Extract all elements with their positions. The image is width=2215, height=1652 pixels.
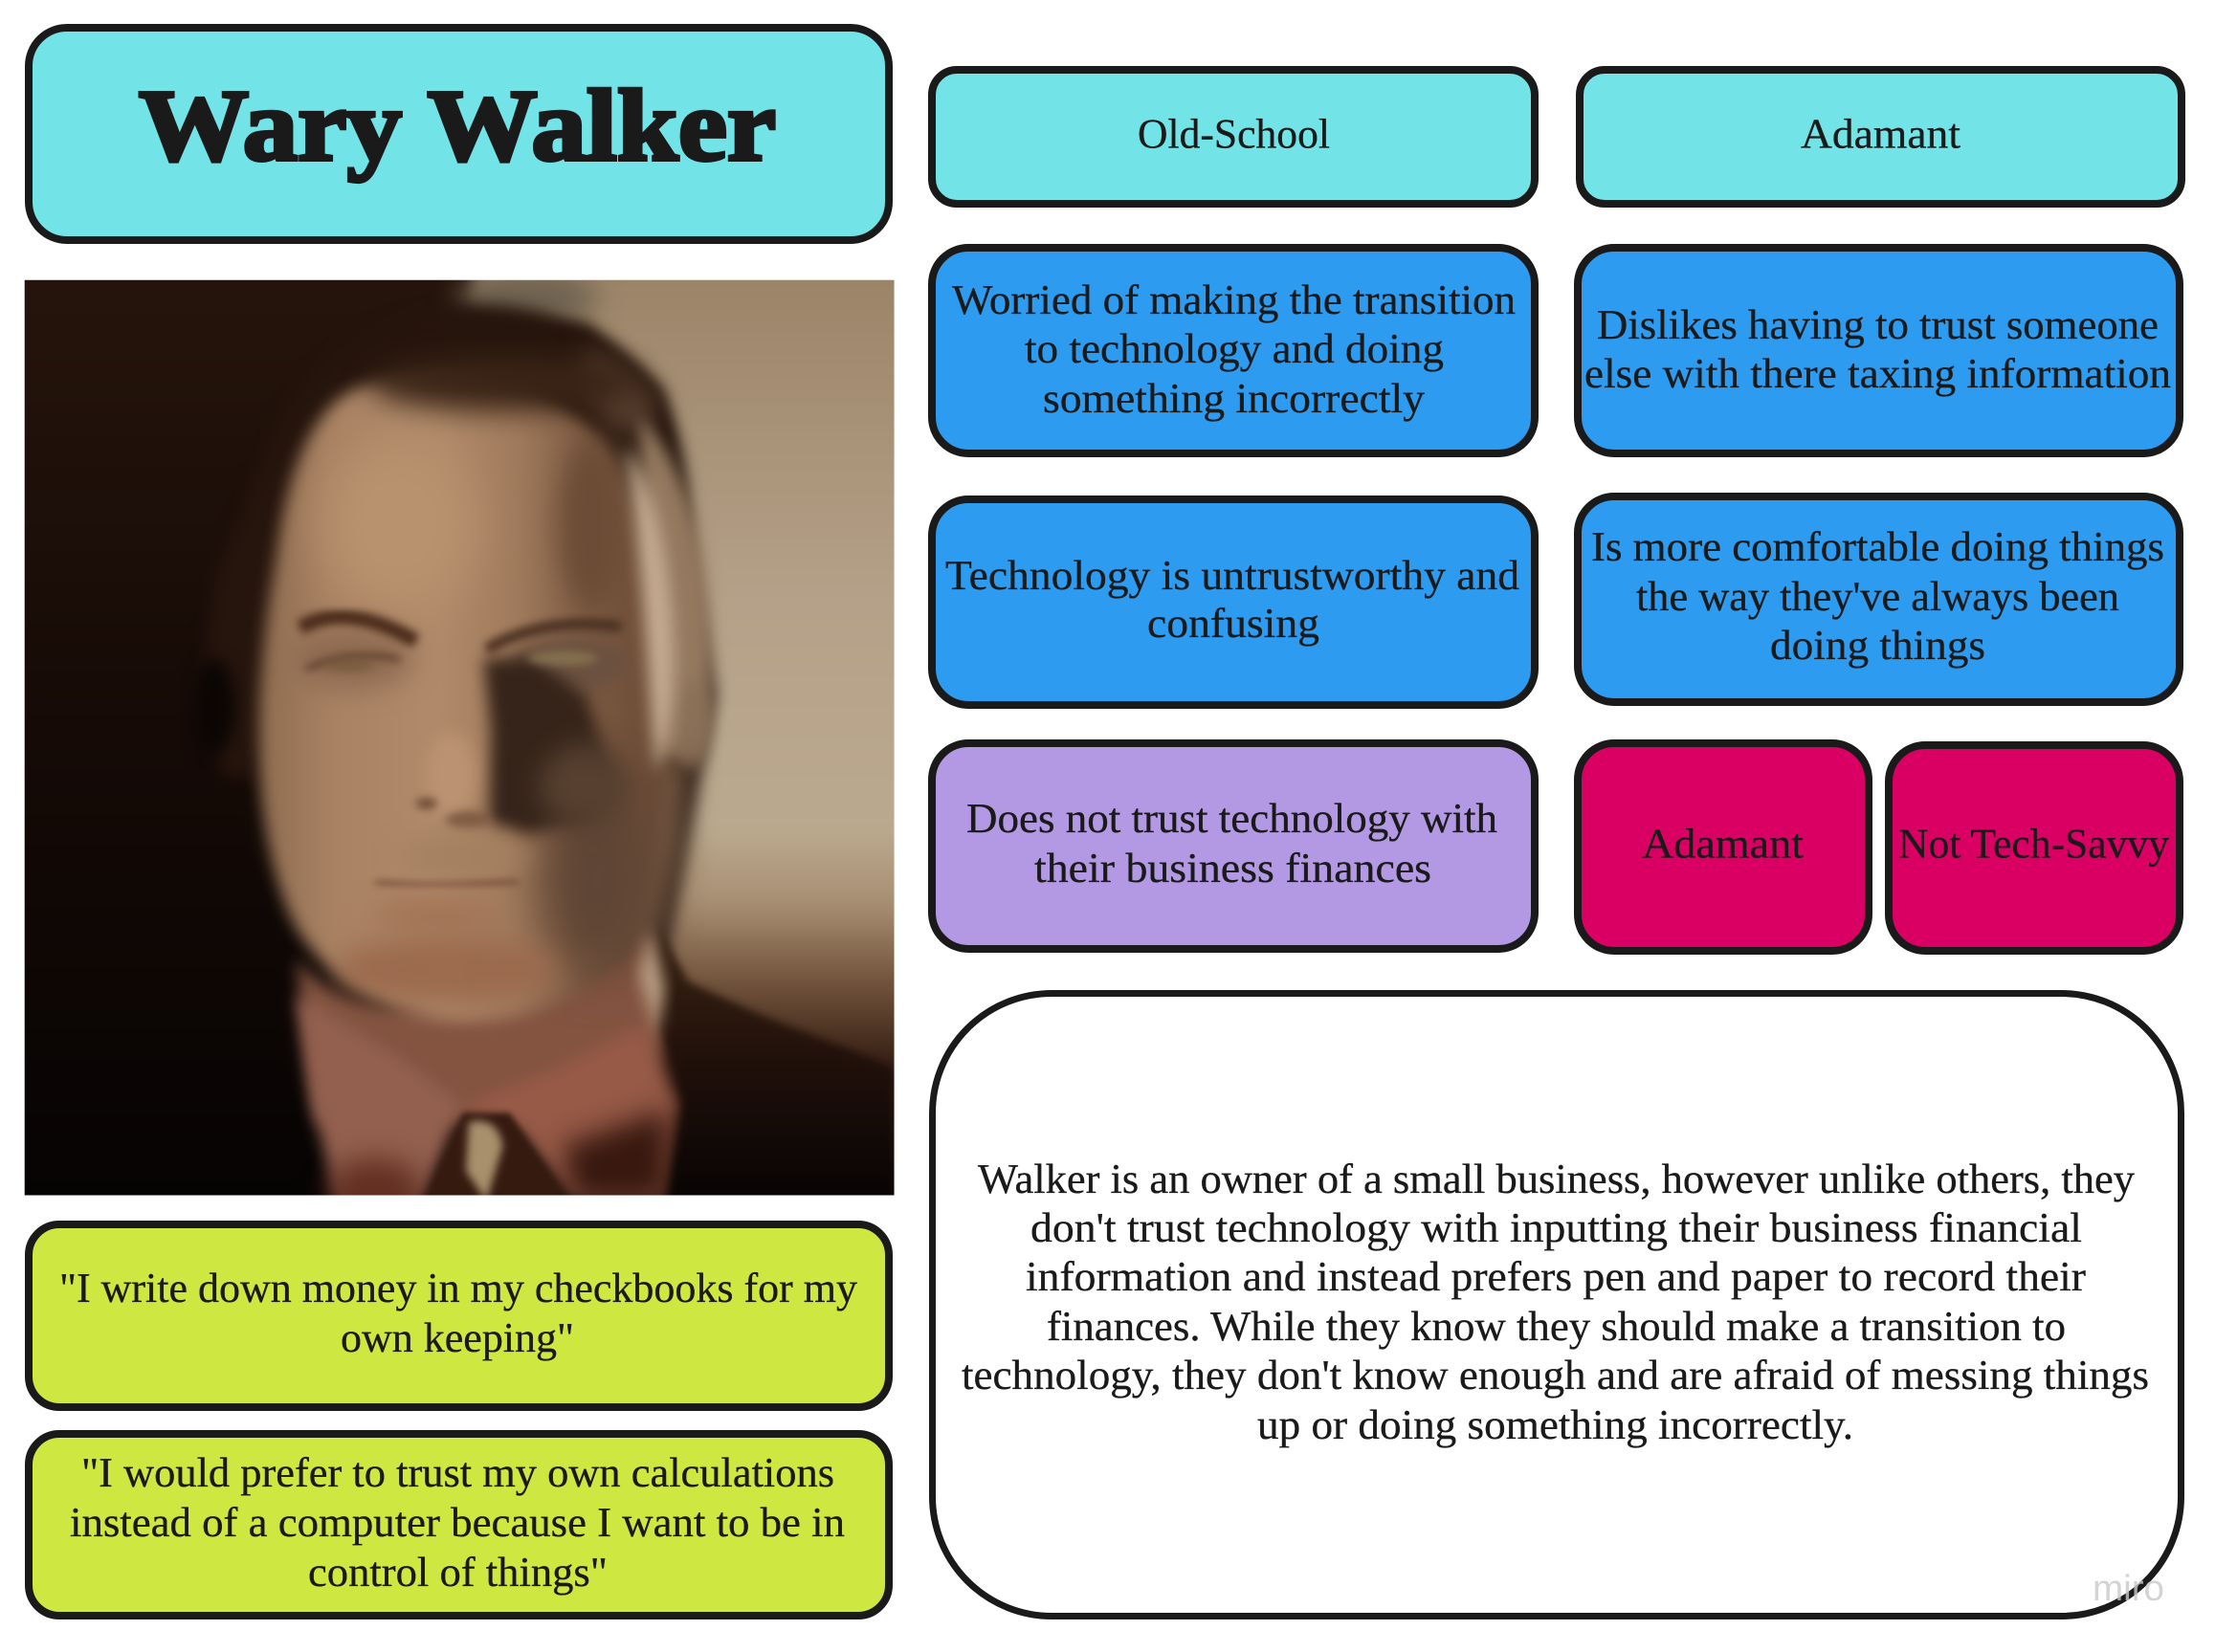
- biography panel: technology, they don't know enough and are afraid of messing things: [962, 1352, 2149, 1399]
- quote: own calculations: [29, 1434, 889, 1616]
- title: [29, 28, 889, 240]
- biography panel: information and instead prefers pen and paper to record their: [1026, 1253, 2086, 1300]
- trait: Adamant: Adamant: [1801, 111, 1960, 157]
- biography panel: [932, 993, 2182, 1617]
- card: more comfortable: doing things: [1770, 622, 1985, 669]
- tag: Not Tech-Savvy: [1889, 745, 2180, 951]
- quote: own calculations: "I would prefer to trust my own calculations: [81, 1449, 834, 1496]
- card: worried of transition: Worried of making the transition: [952, 276, 1516, 323]
- trait: Old-School: [932, 70, 1535, 204]
- card: does not trust with finances: Does not trust technology with: [966, 795, 1497, 842]
- card: more comfortable: Is more comfortable doing things: [1591, 523, 2164, 570]
- title: Wary Walker: [139, 70, 776, 183]
- biography panel: don't trust technology with inputting their business financial: [1030, 1204, 2082, 1251]
- card: does not trust with finances: [932, 743, 1535, 949]
- card: more comfortable: the way they've always been: [1636, 573, 2119, 620]
- card: technology is untrustworthy: [932, 499, 1535, 705]
- card: technology is untrustworthy: Technology is untrustworthy and: [945, 552, 1519, 599]
- biography panel: up or doing something incorrectly.: [1257, 1401, 1853, 1448]
- quote: own calculations: instead of a computer because I want to be in: [70, 1499, 845, 1546]
- tag: Not Tech-Savvy: Not Tech-Savvy: [1898, 821, 2169, 867]
- watermark: miro: miro: [2093, 1569, 2164, 1609]
- card: worried of transition: something incorrectly: [1043, 375, 1425, 422]
- biography panel: Walker is an owner of a small business, however unlike others, they: [978, 1156, 2135, 1202]
- card: technology is untrustworthy: confusing: [1147, 600, 1319, 647]
- tag: Adamant: Adamant: [1642, 821, 1804, 867]
- card: dislikes trusting someone: Dislikes having to trust someone: [1597, 301, 2159, 348]
- quote: checkbooks: [29, 1224, 889, 1407]
- tag: Adamant: [1578, 743, 1869, 951]
- biography panel: finances. While they know they should make a transition to: [1047, 1303, 2066, 1350]
- quote: checkbooks: own keeping": [341, 1314, 574, 1361]
- card: worried of transition: [932, 248, 1535, 453]
- card: does not trust with finances: their business finances: [1034, 845, 1431, 892]
- card: dislikes trusting someone: [1578, 248, 2180, 453]
- quote: own calculations: control of things": [308, 1549, 608, 1596]
- trait: Adamant: [1580, 70, 2182, 204]
- photo: portrait of a man in a suit: [25, 279, 895, 1196]
- card: dislikes trusting someone: else with there taxing information: [1584, 350, 2171, 397]
- quote: checkbooks: "I write down money in my checkbooks for my: [59, 1265, 857, 1311]
- card: more comfortable: [1578, 496, 2180, 702]
- trait: Old-School: Old-School: [1138, 111, 1330, 157]
- card: worried of transition: to technology and doing: [1025, 325, 1444, 372]
